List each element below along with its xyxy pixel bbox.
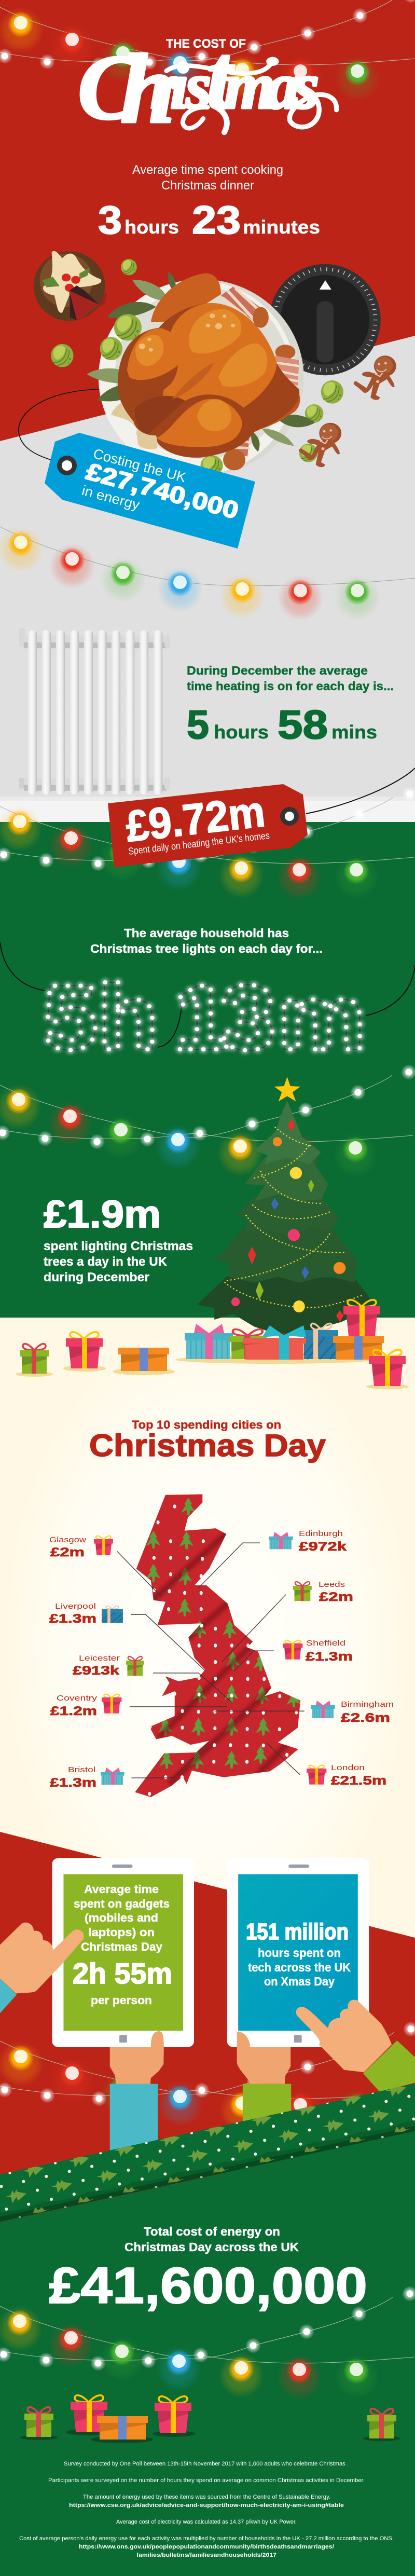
right pointing hand [296,2000,415,2092]
text: sources [19,2461,394,2558]
paper folded shadow [0,2120,415,2222]
text: cooking time intro [132,163,283,193]
title script word: r [150,50,176,122]
paper trees [6,2109,389,2203]
present shadows [20,2429,400,2443]
text: gadgets time: per person [91,1994,152,2007]
illustration: Christmas dinner [19,251,396,476]
present shadows [16,1355,409,1389]
heading: top spending cities: Christmas Day [89,1428,326,1463]
text: gadgets time [73,1883,172,2007]
map wrapping-paper trees [146,1498,301,1769]
paper lobes [0,2115,408,2215]
text: hours on tech [246,1919,351,1988]
text: total cost heading: Christmas Day across the UK [125,2240,299,2254]
stat: 1.9m tree lighting: spent lighting Christmas [44,1239,193,1253]
city: Liverpool: Liverpool [55,1602,96,1611]
decorative wires to lit number [0,942,415,1047]
panel: grey kitchen wall [0,336,415,797]
city: Leeds [293,1580,353,1604]
city: London: £21.5m [331,1774,386,1788]
city: Bristol: Bristol [68,1765,95,1774]
paper dots [0,2091,415,2211]
tag text: Spent daily on heating the UK's homes [128,830,270,857]
city: Coventry [50,1694,121,1718]
text: total cost heading: Total cost of energy on [144,2225,280,2238]
text: heating statement: During December the average [187,664,368,677]
stat: 3 hours 23 minutes: 23 [192,198,241,242]
city: Sheffield: £1.3m [306,1650,353,1664]
panel: green tree lights background [0,822,415,1318]
stat: 1.9m tree lighting: trees a day in the UK [44,1255,168,1269]
city: Liverpool [49,1602,123,1626]
heading: top spending cities: Top 10 spending cities on [132,1418,281,1431]
city: Bristol [50,1765,125,1790]
text: hours on tech: tech across the UK [248,1961,351,1974]
city: Birmingham: Birmingham [341,1700,394,1709]
city: London [307,1763,386,1788]
stat: 3 hours 23 minutes [98,198,320,242]
text: sources: Average cost of electricity was calculated as 14.37 p/kwh by UK Power. [116,2519,297,2525]
tag text: Costing the UK [91,446,188,485]
stat: total cost: £41,600,000 [49,2257,367,2314]
title swashes [167,57,337,132]
text: tree lights statement: The average household has [124,926,289,940]
city: Edinburgh: Edinburgh [299,1529,343,1538]
text: gadgets time: laptops) on [88,1926,155,1939]
city: Edinburgh: £972k [299,1540,347,1554]
icon: oven timer dial [269,264,381,375]
paper half dots [19,2136,384,2219]
text: gadgets time: Average time [84,1883,159,1896]
icon: herb leaves [87,271,315,452]
stat: 3 hours 23 minutes: minutes [243,216,320,238]
city: Leicester: Leicester [79,1654,120,1663]
city: Leeds: £2m [319,1590,353,1604]
presents under tree [16,1300,409,1389]
title script word: i [170,50,188,122]
stat: 3 hours 23 minutes: 3 [98,198,122,242]
icon: pigs in blankets [221,287,299,470]
text: gadgets time: Christmas Day [81,1940,163,1953]
city: Glasgow [49,1536,113,1559]
left pointing hand [0,1923,84,2013]
tag text [80,446,242,524]
text: heating statement: time heating is on for each day is... [187,679,394,693]
text: sources: https://www.ons.gov.uk/peoplepopulationandcommunity/birthsdeathsandmarriages/ [79,2544,334,2550]
city: Leicester: £913k [73,1664,120,1678]
stat: 5 hours 58 mins: 58 [278,702,328,747]
string lights: floor [0,786,415,900]
city: Leicester [73,1654,144,1678]
icon: radiator [19,628,170,794]
panel: skirting board [0,797,415,822]
text: hours on tech: hours spent on [258,1946,341,1960]
stat: 3 hours 23 minutes: hours [125,216,179,238]
city: Sheffield [283,1639,353,1664]
tree garlands [225,1127,363,1308]
panel: cream map background [0,1318,415,1966]
city: Birmingham [311,1700,394,1725]
city: Glasgow: Glasgow [49,1536,86,1544]
presents: footer [20,2395,400,2443]
text: sources: The amount of energy used by these items was sourced from the Centre of Sustainable Energy. [83,2494,330,2500]
icon: roast turkey [111,273,300,458]
map connector lines [117,1543,305,1778]
wide coral present [243,1325,306,1360]
stat: 5 hours 58 mins: 5 [187,702,209,747]
city: Leeds: Leeds [319,1580,345,1589]
tag text: £27,740,000 [83,457,242,524]
icon: christmas pudding [34,251,107,321]
title script word: m [224,50,275,122]
city: Coventry: £1.2m [50,1704,97,1718]
callout string [19,389,99,463]
text: sources: Cost of average person's daily energy use for each activity was multiplied by number of households in the UK - 27.2 million according to the ONS. [19,2536,394,2542]
string lights: tree section [0,1064,415,1178]
stat: 1.9m tree lighting: during December [44,1270,149,1284]
tag text: in energy [80,483,142,513]
text: sources: Survey conducted by One Poll between 13th-15th November 2017 with 1,000 adults who celebrate Christmas . [64,2461,349,2467]
text: gadgets time: spent on gadgets [74,1897,170,1910]
string lights: title [0,0,415,101]
string lights: footer [0,2286,415,2400]
city: Sheffield: Sheffield [306,1639,345,1648]
city: London: London [331,1763,365,1772]
text: sources: Participants were surveyed on the number of hours they spend on average on common Christmas activities in December. [48,2477,365,2484]
paper fold trees [23,2084,411,2213]
text: gadgets time: (mobiles and [85,1911,158,1924]
panel: red title background [0,0,415,441]
text: sources: families/bulletins/familiesandhouseholds/2017 [136,2552,276,2558]
text: sources: https://www.cse.org.uk/advice/advice-and-support/how-much-electricity-am-i-using#table [69,2502,344,2509]
title [78,25,337,144]
text: cooking time intro: Average time spent cooking [132,163,283,177]
callout: red price tag [108,768,415,867]
text: heating statement [187,664,394,693]
text: gadgets time: 2h 55m [73,1957,172,1990]
map: UK in wrapping paper [117,1489,307,1804]
city: Edinburgh [269,1529,347,1554]
title script word: s [185,50,211,122]
city: Bristol: £1.3m [50,1776,96,1790]
title script word: a [267,50,299,122]
title script word: h [120,35,175,144]
illustration: tablets and hands [0,1858,415,2154]
tag text: £9.72m [123,787,267,851]
city: Glasgow: £2m [50,1545,85,1559]
text: tree lights statement [90,926,323,955]
icon: plate [99,279,304,476]
left tablet [52,1858,194,2047]
right holding hand and sleeve [237,2032,291,2126]
stat: 5 hours 58 mins: mins [331,721,377,743]
icon: plate sprouts [100,314,223,476]
title script word: s [293,50,319,122]
title script word: C [78,36,141,139]
stat: 5 hours 58 mins [187,702,377,747]
title script word: t [206,25,234,128]
panel: green footer background [0,2131,415,2576]
right tablet [227,1858,369,2047]
stat: 1.9m tree lighting [44,1193,193,1284]
text: tree lights statement: Christmas tree lights on each day for... [90,942,323,955]
city: Birmingham: £2.6m [341,1711,390,1725]
tag hole [280,807,299,826]
string lights: gadgets [0,2021,415,2135]
icon: gingerbread men [299,355,396,467]
stat: 1.9m tree lighting: £1.9m [44,1193,161,1236]
illustration: Christmas tree [197,1077,376,1336]
stat: 5h 13m in fairy lights: 5h13m [43,966,366,1069]
title kicker: THE COST OF [166,37,246,51]
stat: 5h 13m in fairy lights: 5h13m [43,966,366,1069]
panel: red gadgets background [0,1832,415,2226]
left holding hand and sleeve [110,2031,164,2154]
text: total cost heading [125,2225,299,2254]
tree ornaments [231,1119,345,1322]
text: hours on tech: on Xmas Day [264,1975,335,1988]
stat: 5 hours 58 mins: hours [214,721,269,743]
tag string [306,768,415,814]
text: hours on tech: 151 million [246,1919,349,1944]
string lights: kitchen wall [0,527,415,621]
stat: 5h 13m in fairy lights: 5h13m [43,966,366,1069]
text: cooking time intro: Christmas dinner [161,179,254,193]
city: Coventry: Coventry [57,1694,98,1703]
callout: blue price tag [45,433,255,549]
tree star [274,1077,300,1101]
map wrapping-paper dots [148,1504,298,1796]
icon: loose sprouts [51,259,343,462]
panel: green wrapping paper [0,2084,415,2222]
tag hole [57,456,77,475]
city: Liverpool: £1.3m [49,1612,96,1626]
